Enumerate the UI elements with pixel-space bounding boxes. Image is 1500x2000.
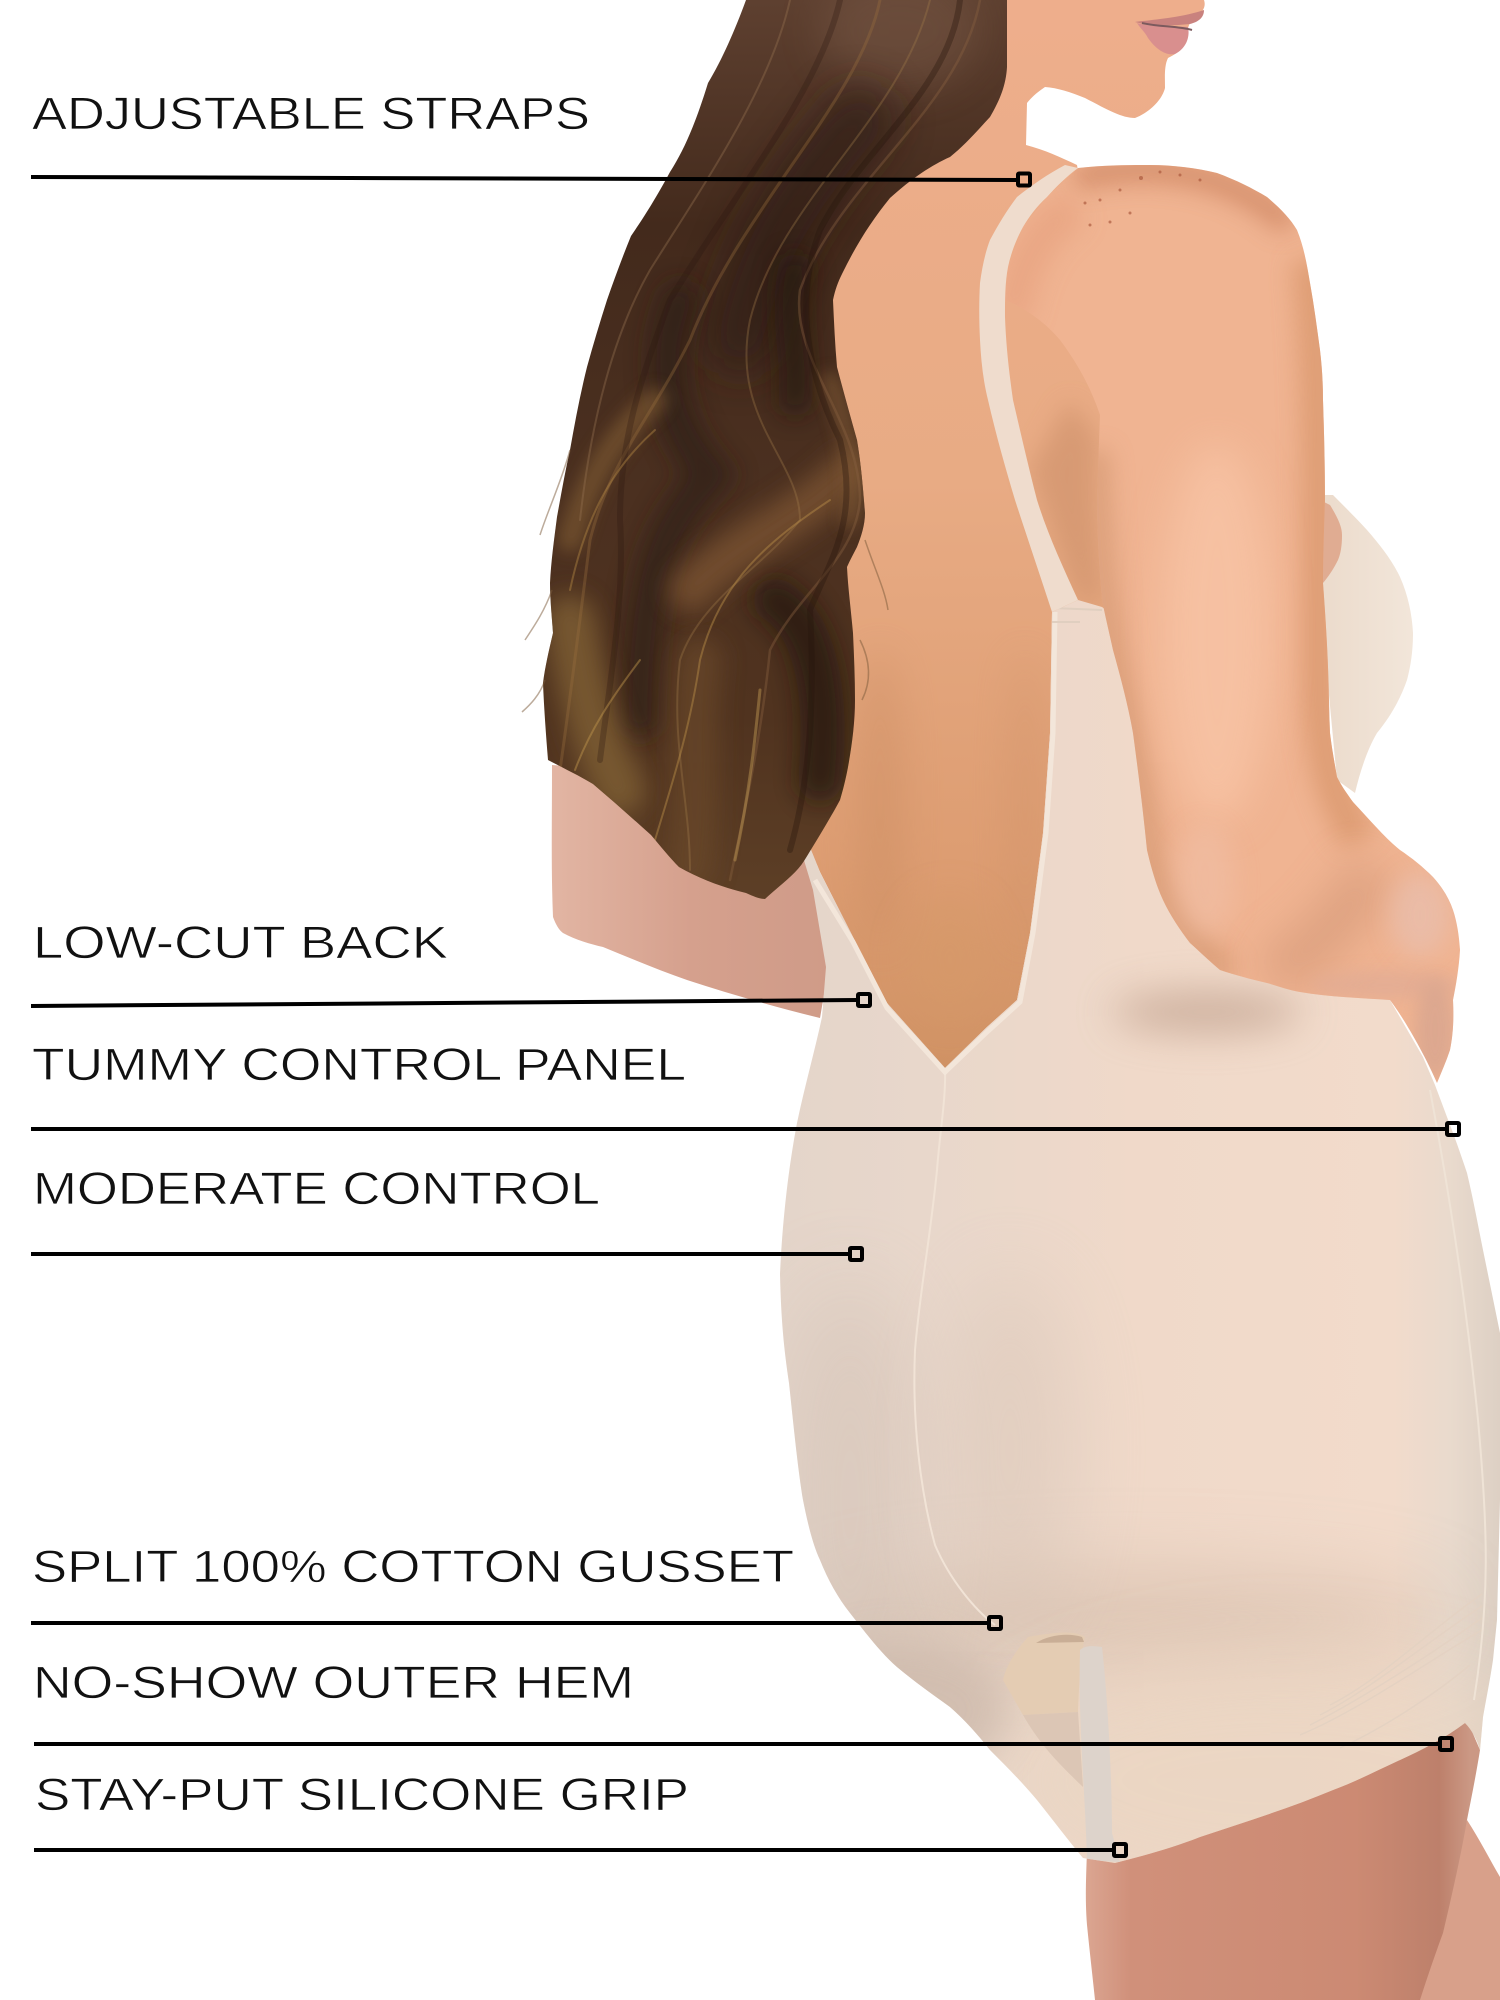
callout: split cotton gusset: SPLIT 100% COTTON GUSSET — [32, 1541, 794, 1592]
callout: low-cut back — [31, 917, 870, 1006]
front thigh — [1086, 1715, 1480, 2000]
callout: moderate control: MODERATE CONTROL — [33, 1163, 600, 1214]
garment body — [780, 600, 1500, 1900]
callout: stay-put silicone grip — [34, 1769, 1126, 1856]
hair wisps — [522, 450, 888, 712]
back leg — [1400, 1820, 1500, 2000]
face: lips — [1135, 10, 1204, 54]
callout: adjustable straps: ADJUSTABLE STRAPS — [32, 88, 590, 139]
callout: stay-put silicone grip: STAY-PUT SILICONE GRIP — [35, 1769, 689, 1820]
garment shading — [780, 992, 1500, 1900]
callout: tummy control panel: TUMMY CONTROL PANEL — [32, 1039, 686, 1090]
gusset opening — [1036, 1635, 1084, 1643]
V-neck trim — [815, 612, 1055, 1072]
callout: no-show outer hem — [33, 1657, 1452, 1750]
gusset — [1004, 1641, 1082, 1715]
gusset lower panel — [1023, 1712, 1083, 1787]
callout: adjustable straps — [31, 88, 1030, 186]
model photo illustration — [522, 0, 1500, 2000]
side seam strip — [1080, 1646, 1120, 1862]
right side seam — [1430, 1090, 1486, 1700]
back and neck skin — [780, 0, 1205, 1068]
shadows on back — [858, 400, 1102, 1020]
strap join stitch — [1052, 608, 1102, 622]
callout: no-show outer hem: NO-SHOW OUTER HEM — [33, 1657, 634, 1708]
skin behind bra cup — [1320, 500, 1342, 583]
callout: moderate control — [31, 1163, 862, 1260]
hair — [522, 0, 1007, 899]
callout: split cotton gusset — [31, 1541, 1001, 1629]
hair strands — [560, 0, 980, 880]
right arm and shoulder — [1036, 165, 1460, 1083]
shoulder strap — [979, 165, 1078, 612]
arm shading — [1010, 170, 1460, 1080]
freckles on shoulder — [1084, 170, 1202, 226]
bra cup — [1320, 495, 1413, 793]
callout: tummy control panel — [31, 1039, 1459, 1135]
centre back seam — [914, 1068, 995, 1625]
left forearm — [552, 765, 830, 1018]
hem ribbing — [1300, 1676, 1397, 1748]
hair tones — [570, 0, 980, 870]
callout: low-cut back: LOW-CUT BACK — [33, 917, 448, 968]
